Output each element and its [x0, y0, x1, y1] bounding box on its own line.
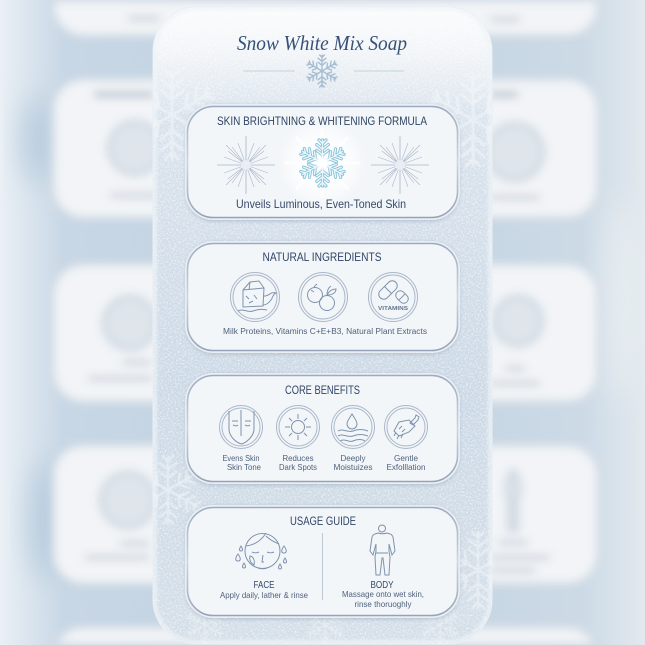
benefit: evens skin: Skin Tone [227, 462, 261, 472]
heading: natural ingredients: NATURAL INGREDIENTS [262, 250, 382, 264]
panel: core benefits [185, 373, 460, 486]
icon: body figure [370, 525, 395, 575]
panel: skin brightening [185, 104, 460, 222]
icon: right starburst [371, 136, 429, 194]
title divider left [243, 70, 295, 72]
icon: glowing snowflake [278, 119, 366, 207]
benefit: exfoliation: Gentle [394, 453, 418, 463]
benefit: exfoliation [384, 406, 428, 472]
benefit: exfoliation: Exfolllation [386, 462, 426, 472]
icon: vitamins: VITAMINS [378, 306, 408, 312]
benefit: dark spots: Dark Spots [279, 462, 317, 472]
title divider right [354, 70, 404, 72]
icon: left starburst [217, 136, 275, 194]
icon: milk carton [230, 272, 280, 322]
icon: fruits [298, 272, 348, 322]
benefit: moisturizes [332, 406, 374, 472]
heading: usage guide: USAGE GUIDE [290, 514, 356, 528]
divider [322, 533, 323, 600]
main panel [152, 9, 492, 644]
caption: skin brightening: Unveils Luminous, Even-Toned Skin [236, 197, 406, 211]
icon: face with droplets [236, 533, 286, 569]
heading: core benefits: CORE BENEFITS [285, 383, 360, 397]
benefit: dark spots: Reduces [282, 453, 314, 463]
benefit: moisturizes: Deeply [340, 453, 366, 463]
label: body: Massage onto wet skin, [342, 589, 424, 599]
label: face [220, 580, 308, 600]
label: body [342, 580, 424, 609]
caption: ingredients: Milk Proteins, Vitamins C+E+B3, Natural Plant Extracts [223, 326, 427, 336]
label: face: Apply daily, lather & rinse [220, 590, 308, 600]
icon: title snowflake [306, 55, 338, 87]
label: body: rinse thoruoghly [354, 599, 412, 609]
icon: vitamins [368, 272, 418, 322]
benefit: evens skin: Evens Skin [222, 453, 260, 463]
title: Snow White Mix Soap [237, 31, 407, 55]
benefit: dark spots [276, 406, 320, 472]
heading: skin brightening: SKIN BRIGHTNING & WHITENING FORMULA [217, 114, 427, 128]
panel: natural ingredients [185, 241, 460, 354]
label: face: FACE [254, 580, 275, 591]
label: body: BODY [370, 580, 394, 591]
benefit: evens skin [220, 406, 262, 472]
benefit: moisturizes: Moistuizes [334, 462, 372, 472]
panel: usage guide [185, 505, 460, 620]
